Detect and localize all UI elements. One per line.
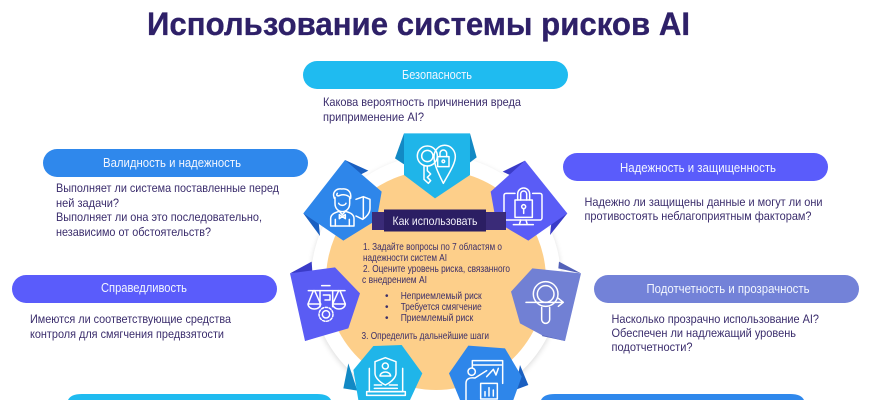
text: how to use steps: • (385, 291, 389, 302)
pill: Валидность и надежность: Валидность и надежность (103, 155, 241, 170)
pill: Подотчетность и прозрачность (594, 275, 859, 303)
text: Безопасность question (323, 95, 521, 124)
pill: Валидность и надежность (43, 149, 308, 177)
pill: bottom left, cut off (68, 394, 331, 400)
pill: Безопасность: Безопасность (402, 67, 472, 82)
text: how to use steps (362, 241, 510, 342)
text: how to use steps: • (385, 302, 389, 313)
panel: Справедливость (12, 275, 277, 341)
pill: Справедливость: Справедливость (101, 280, 187, 295)
segment: upper left, person with shield icon (303, 160, 382, 241)
pill: Надежность и защищенность (563, 153, 828, 181)
white ring (311, 155, 561, 400)
text: Подотчетность questions: Обеспечен ли надлежащий уровень (612, 326, 796, 340)
title: Использование системы рисков AI (147, 6, 690, 42)
text: Справедливость question (30, 312, 231, 341)
text: Подотчетность questions: подотчетности? (612, 340, 693, 354)
text: Справедливость question: Имеются ли соответствующие средства (30, 312, 231, 326)
text: Безопасность question: Какова вероятность причинения вреда (323, 95, 521, 109)
pill: Надежность и защищенность: Надежность и защищенность (620, 160, 776, 175)
banner: Как использовать: Как использовать (392, 214, 478, 228)
segment: left, scales and gear icon (290, 262, 360, 341)
text: how to use steps: Неприемлемый риск (401, 291, 482, 302)
text: how to use steps: 2. Оцените уровень риска, связанного (363, 264, 510, 275)
text: Валидность questions: ней задачи? (56, 196, 119, 210)
segment: bottom right, presenter and chart icon (449, 346, 528, 400)
text: how to use steps: Требуется смягчение (401, 301, 482, 313)
banner: Как использовать (372, 210, 506, 232)
segment: right, magnifier and arrow icon (511, 262, 581, 341)
orange disc (326, 170, 546, 390)
text: how to use steps: с внедрением AI (362, 275, 427, 286)
text: how to use steps: Приемлемый риск (401, 313, 474, 324)
segment: top, key and lock icon (395, 133, 477, 198)
ring shadow (311, 157, 561, 400)
panel: Безопасность (303, 61, 568, 124)
segment: upper right, monitor with lock icon (491, 161, 567, 241)
text: Подотчетность questions (612, 312, 819, 354)
text: Подотчетность questions: Насколько прозрачно использование AI? (612, 312, 819, 326)
central wheel (290, 133, 581, 400)
pill: Безопасность (303, 61, 568, 89)
text: how to use steps: • (385, 313, 389, 324)
text: Справедливость question: контроля для смягчения предвзятости (30, 327, 224, 341)
pill: bottom right, cut off (541, 394, 804, 400)
text: Валидность questions: независимо от обстоятельств? (56, 225, 211, 239)
panel: Подотчетность и прозрачность (594, 275, 859, 354)
segment: bottom left, laptop and shield icon (343, 345, 422, 400)
text: Валидность questions (56, 181, 279, 239)
text: how to use steps: 1. Задайте вопросы по 7 областям о (363, 241, 502, 253)
text: Надежность question: противостоять неблагоприятным факторам? (584, 209, 812, 223)
panel: Надежность и защищенность (563, 153, 828, 223)
text: how to use steps: 3. Определить дальнейшие шаги (362, 331, 489, 342)
text: Надежность question: Надежно ли защищены данные и могут ли они (584, 195, 822, 209)
text: Валидность questions: Выполняет ли она это последовательно, (56, 210, 262, 224)
text: Надежность question (584, 195, 822, 223)
text: how to use steps: надежности систем AI (363, 253, 447, 264)
text: Безопасность question: приприменение AI? (323, 110, 424, 124)
panel: Валидность и надежность (43, 149, 308, 239)
text: Валидность questions: Выполняет ли система поставленные перед (56, 181, 279, 195)
pill: Справедливость (12, 275, 277, 303)
pill: Подотчетность и прозрачность: Подотчетность и прозрачность (646, 281, 810, 296)
